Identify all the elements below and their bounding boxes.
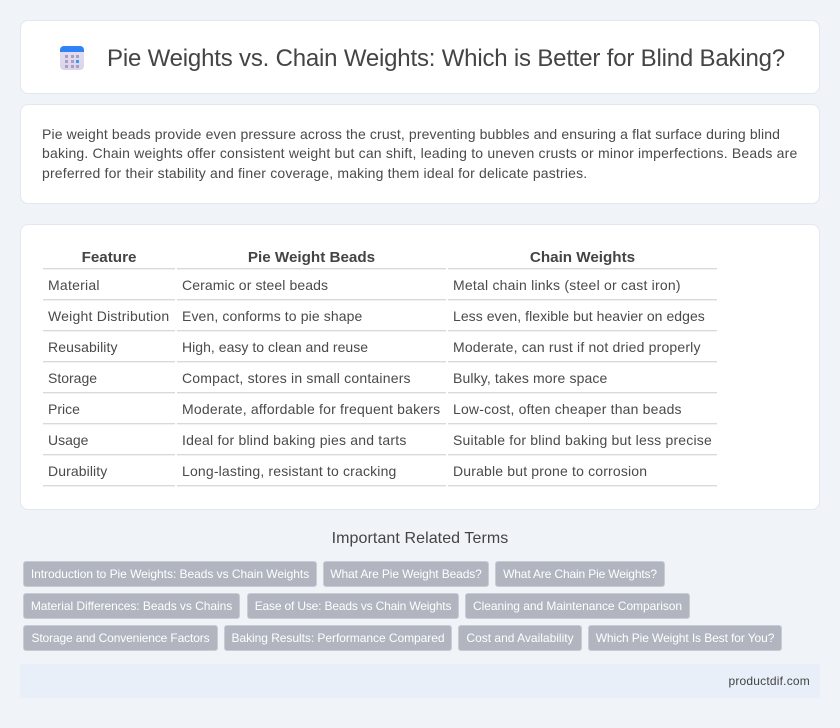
- related term tags: Introduction to Pie Weights: Beads vs Chain Weights: [31, 567, 309, 581]
- footer bar: [20, 664, 820, 698]
- comparison table: Reusability: [48, 339, 118, 355]
- related term tags: Which Pie Weight Is Best for You?: [596, 631, 774, 645]
- panel: comparison table card: [20, 224, 820, 510]
- title: Pie Weights vs. Chain Weights: Which is Better for Blind Baking?: [107, 45, 785, 72]
- related term tags: Cost and Availability: [466, 631, 574, 645]
- comparison table: Usage: [48, 432, 88, 448]
- icon: calendar: [60, 46, 84, 70]
- comparison table: Long-lasting, resistant to cracking: [182, 463, 397, 479]
- related term tags: Cleaning and Maintenance Comparison: [473, 599, 682, 613]
- comparison table: Weight Distribution: [48, 308, 169, 324]
- comparison table: [43, 249, 717, 487]
- comparison table: Durable but prone to corrosion: [453, 463, 647, 479]
- comparison table: Material: [48, 277, 100, 293]
- related term tags: Ease of Use: Beads vs Chain Weights: [255, 599, 451, 613]
- comparison table: Compact, stores in small containers: [182, 370, 411, 386]
- comparison table: Durability: [48, 463, 107, 479]
- panel: title card: [20, 20, 820, 94]
- comparison table: Even, conforms to pie shape: [182, 308, 362, 324]
- comparison table: Less even, flexible but heavier on edges: [453, 308, 705, 324]
- related term tags: What Are Pie Weight Beads?: [330, 567, 482, 581]
- heading: related terms: Important Related Terms: [332, 530, 508, 547]
- related term tags: Baking Results: Performance Compared: [232, 631, 444, 645]
- related term tags: [23, 561, 782, 651]
- comparison table: Price: [48, 401, 80, 417]
- comparison table: Feature: [82, 249, 136, 266]
- text block: summary: preferred for their stability and finer coverage, making them ideal for delicate pastries.: [42, 165, 587, 181]
- comparison table: Moderate, affordable for frequent bakers: [182, 401, 440, 417]
- footer source text: productdif.com: [728, 674, 810, 688]
- comparison table: Suitable for blind baking but less precise: [453, 432, 712, 448]
- panel: summary card: [20, 104, 820, 204]
- comparison table: High, easy to clean and reuse: [182, 339, 368, 355]
- text block: summary: baking. Chain weights offer consistent weight but can shift, leading to uneven crusts or minor imperfections. Beads are: [42, 145, 797, 161]
- comparison table: Pie Weight Beads: [248, 249, 375, 266]
- comparison table: Bulky, takes more space: [453, 370, 607, 386]
- comparison table: Low-cost, often cheaper than beads: [453, 401, 682, 417]
- comparison table: Ceramic or steel beads: [182, 277, 328, 293]
- text block: summary: [42, 126, 797, 181]
- comparison table: Ideal for blind baking pies and tarts: [182, 432, 407, 448]
- comparison table: Metal chain links (steel or cast iron): [453, 277, 681, 293]
- comparison table: Chain Weights: [530, 249, 635, 266]
- text block: summary: Pie weight beads provide even pressure across the crust, preventing bubbles and ensuring a flat surface during blind: [42, 126, 780, 142]
- related term tags: Storage and Convenience Factors: [31, 631, 210, 645]
- related term tags: Material Differences: Beads vs Chains: [31, 599, 232, 613]
- comparison table: Moderate, can rust if not dried properly: [453, 339, 701, 355]
- comparison table: Storage: [48, 370, 97, 386]
- related term tags: What Are Chain Pie Weights?: [503, 567, 657, 581]
